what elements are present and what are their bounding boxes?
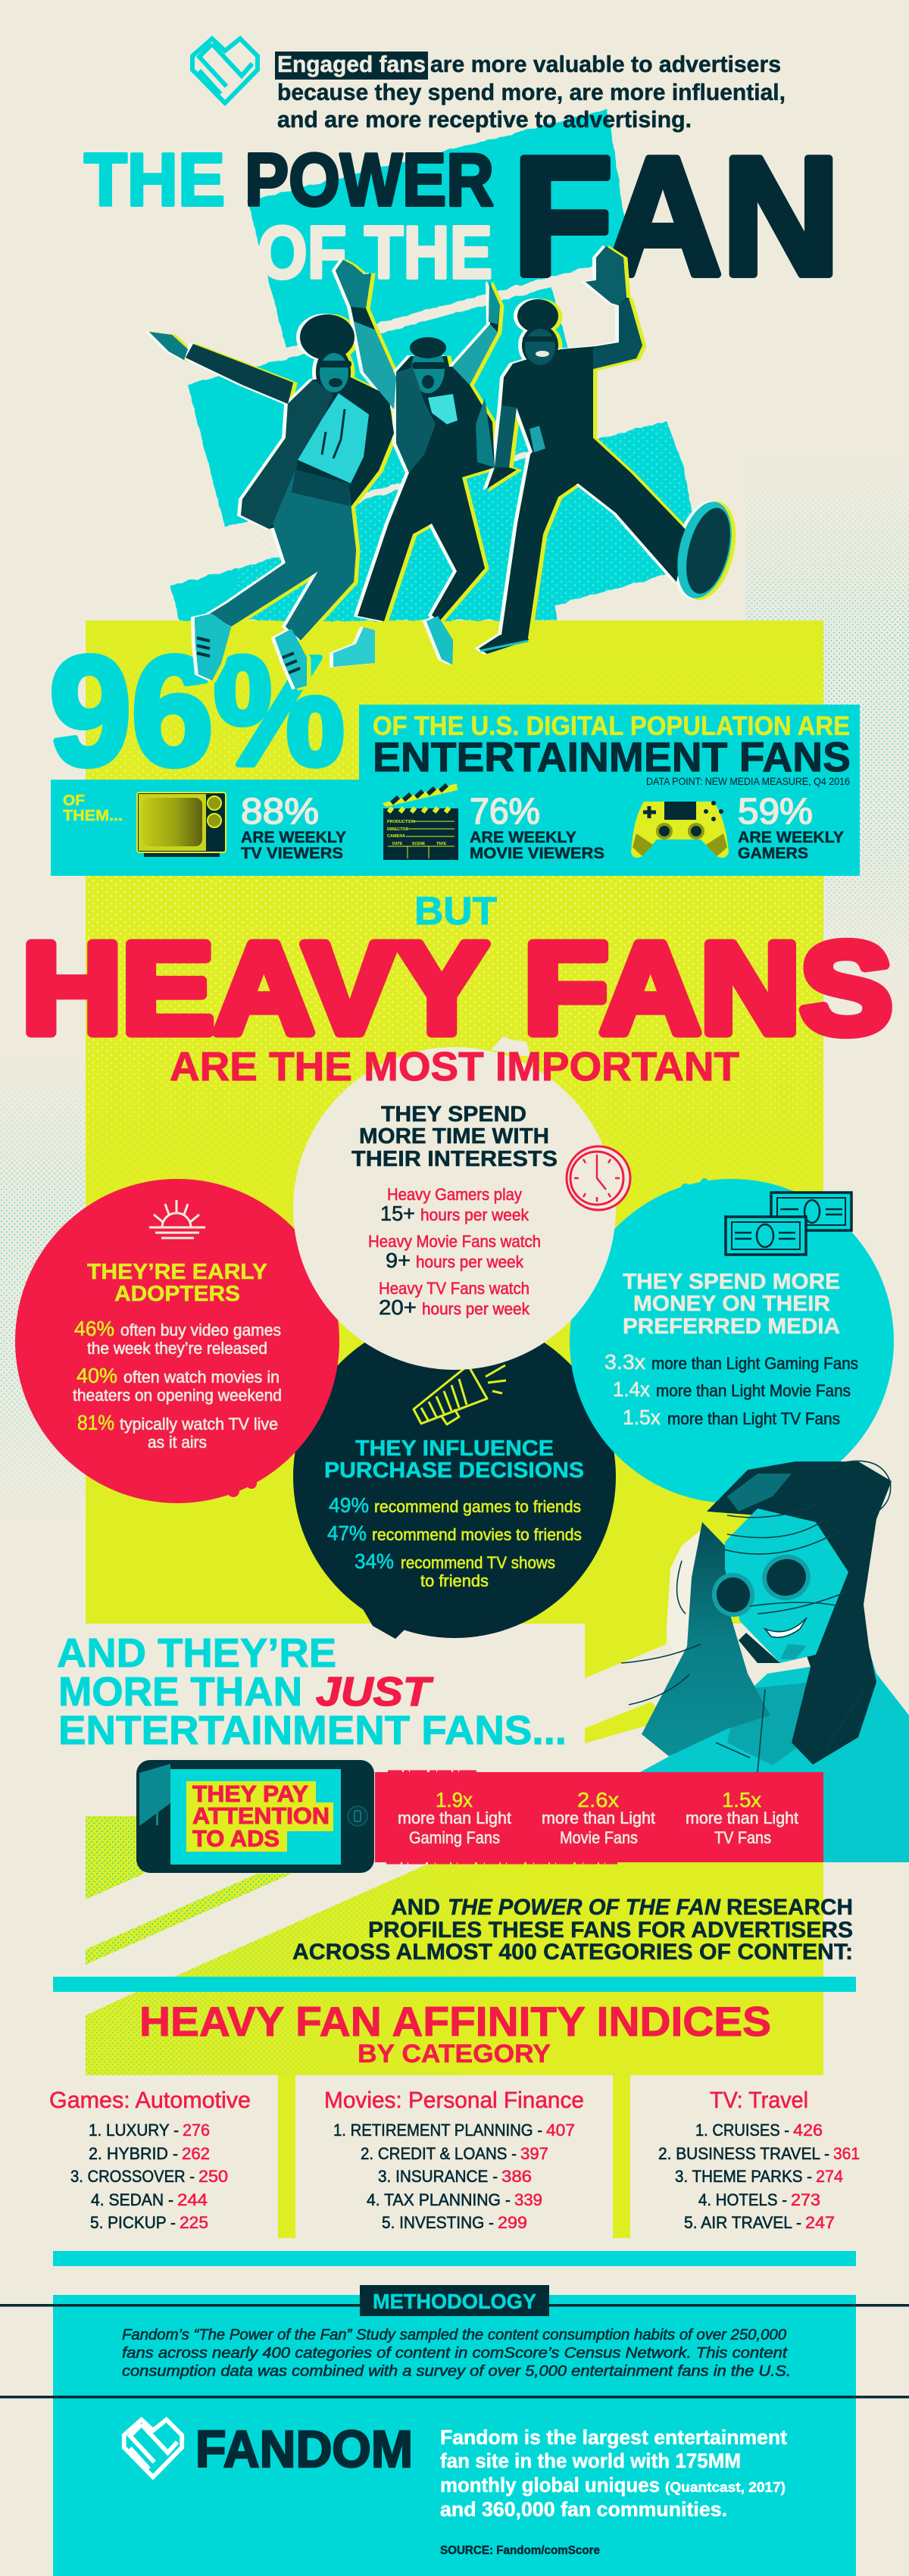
list: movies personal finance: 386 bbox=[501, 2167, 532, 2186]
time stats bbox=[368, 1185, 541, 1319]
heading: they spend more time: THEY SPEND bbox=[381, 1102, 526, 1127]
money stats: more than Light Movie Fans bbox=[656, 1381, 851, 1400]
heading: they spend more money: PREFERRED MEDIA bbox=[623, 1315, 840, 1339]
list: movies personal finance: 299 bbox=[498, 2213, 527, 2232]
text: research profiles: ACROSS ALMOST 400 CATEGORIES OF CONTENT: bbox=[292, 1940, 853, 1965]
band halftone bbox=[227, 421, 693, 621]
heading: they spend more money: THEY SPEND MORE bbox=[623, 1270, 840, 1294]
list: games automotive: 1. LUXURY - bbox=[89, 2121, 179, 2140]
title bbox=[84, 123, 840, 311]
adopter stats: 81% bbox=[77, 1411, 114, 1434]
logo: fandom wordmark: FANDOM bbox=[195, 2420, 413, 2478]
list: tv travel: 4. HOTELS - bbox=[698, 2190, 787, 2209]
icon: banknotes bbox=[726, 1193, 851, 1255]
list: movies personal finance: 1. RETIREMENT PLANNING - bbox=[333, 2121, 542, 2140]
list: games automotive: 250 bbox=[198, 2167, 228, 2186]
icon: phone with they pay attention to ads: THEY PAY bbox=[192, 1780, 308, 1807]
intro text: Engaged fans bbox=[277, 51, 426, 77]
money stats: more than Light TV Fans bbox=[667, 1409, 840, 1428]
list: tv travel: 361 bbox=[833, 2144, 860, 2163]
panel: methodology and fandom bbox=[0, 2285, 909, 2576]
icon: megaphone bbox=[414, 1355, 506, 1424]
adopter stats: 46% bbox=[74, 1317, 114, 1340]
heading: are the most important: ARE THE MOST IMPORTANT bbox=[170, 1044, 739, 1089]
text: research profiles: PROFILES THESE FANS FOR ADVERTISERS bbox=[368, 1918, 853, 1943]
list: games automotive: 2. HYBRID - bbox=[89, 2144, 178, 2163]
torn cyan hero bands bbox=[170, 109, 693, 621]
list: tv travel: 1. CRUISES - bbox=[695, 2121, 789, 2140]
heading: more than just entertainment fans bbox=[57, 1630, 567, 1753]
of them label bbox=[63, 792, 123, 824]
money stats: 3.3x bbox=[604, 1350, 645, 1374]
methodology text: fans across nearly 400 categories of content in comScore’s Census Network. This content bbox=[122, 2345, 789, 2362]
heading: heavy fan affinity indices bbox=[139, 1998, 771, 2068]
list: movies personal finance bbox=[324, 2087, 584, 2232]
heading: they're early adopters: THEY’RE EARLY bbox=[87, 1260, 267, 1284]
list: games automotive: 3. CROSSOVER - bbox=[70, 2167, 195, 2186]
influence stats: to friends bbox=[420, 1571, 489, 1590]
stat: TV fans: TV Fans bbox=[714, 1828, 771, 1847]
text: research profiles bbox=[292, 1895, 853, 1965]
adopter stats: 40% bbox=[77, 1364, 117, 1387]
heading: they spend more time bbox=[351, 1102, 558, 1171]
list: movies personal finance: 3. INSURANCE - bbox=[378, 2167, 498, 2186]
time stats: hours per week bbox=[422, 1299, 530, 1318]
heading: they influence bbox=[324, 1436, 584, 1483]
stat: 88 percent TV bbox=[241, 792, 346, 862]
icon: phone with they pay attention to ads: ATTENTION bbox=[192, 1802, 330, 1829]
influence stats: 49% bbox=[329, 1493, 369, 1517]
stat: 76 percent movies bbox=[470, 792, 604, 862]
heading: they influence: PURCHASE DECISIONS bbox=[324, 1458, 584, 1483]
influence stats: 34% bbox=[355, 1549, 394, 1573]
stat: TV fans: more than Light bbox=[686, 1809, 798, 1827]
list: games automotive: 4. SEDAN - bbox=[91, 2190, 173, 2209]
stat: 59 percent gamers: ARE WEEKLY bbox=[738, 829, 844, 846]
list: tv travel: 426 bbox=[793, 2121, 823, 2140]
heading: they spend more time: MORE TIME WITH bbox=[359, 1124, 549, 1149]
adopter stats: often watch movies in bbox=[123, 1368, 280, 1386]
heading: they spend more money: MONEY ON THEIR bbox=[633, 1292, 830, 1316]
headline: of the U.S. digital population: OF THE U.S. DIGITAL POPULATION ARE bbox=[373, 711, 850, 741]
list: movies personal finance: 4. TAX PLANNING - bbox=[367, 2190, 511, 2209]
methodology text: consumption data was combined with a survey of over 5,000 entertainment fans in the U.S. bbox=[122, 2363, 791, 2380]
icon: clapperboard: PRODUCTION bbox=[387, 820, 415, 824]
icon: clapperboard: SCENE bbox=[412, 842, 426, 846]
list: movies personal finance: 2. CREDIT & LOANS - bbox=[361, 2144, 517, 2163]
title: OF THE bbox=[258, 211, 492, 294]
of them label: THEM... bbox=[63, 808, 123, 824]
heading: more than just entertainment fans: MORE THAN bbox=[58, 1669, 302, 1715]
heading: but: BUT bbox=[414, 889, 497, 933]
stat: gaming fans: more than Light bbox=[398, 1809, 511, 1827]
methodology text: Fandom’s “The Power of the Fan” Study sampled the content consumption habits of over 250,000 bbox=[122, 2327, 786, 2343]
headline: entertainment fans: ENTERTAINMENT FANS bbox=[373, 733, 851, 780]
stat: TV fans bbox=[686, 1788, 798, 1847]
list: tv travel: 247 bbox=[805, 2213, 835, 2232]
logo: heart top bbox=[192, 39, 258, 103]
stat: 76 percent movies: MOVIE VIEWERS bbox=[470, 845, 604, 862]
decorative halftone top right bbox=[746, 455, 909, 1000]
logo: fandom heart bbox=[124, 2420, 182, 2477]
title: FAN bbox=[513, 123, 840, 311]
list: tv travel: 2. BUSINESS TRAVEL - bbox=[658, 2144, 829, 2163]
intro text bbox=[275, 51, 786, 133]
stat: movie fans bbox=[542, 1788, 655, 1847]
heading: more than just entertainment fans: JUST bbox=[316, 1669, 433, 1715]
fandom description: fan site in the world with 175MM bbox=[440, 2449, 741, 2472]
influence stats bbox=[327, 1493, 582, 1590]
list: movies personal finance: 5. INVESTING - bbox=[382, 2213, 494, 2232]
list: games automotive: 244 bbox=[177, 2190, 208, 2209]
adopter stats bbox=[73, 1317, 282, 1452]
adopter stats: typically watch TV live bbox=[120, 1415, 278, 1433]
heading: they spend more money bbox=[623, 1270, 840, 1339]
money stats bbox=[604, 1350, 858, 1429]
circle: spend more money bbox=[570, 1178, 894, 1503]
list: games automotive: 262 bbox=[182, 2144, 210, 2163]
stat: movie fans: 2.6x bbox=[577, 1788, 619, 1812]
adopter stats: the week they’re released bbox=[87, 1339, 267, 1358]
list: tv travel: 5. AIR TRAVEL - bbox=[684, 2213, 801, 2232]
heading: heavy fan affinity indices: HEAVY FAN AFFINITY INDICES bbox=[139, 1998, 771, 2045]
list: tv travel bbox=[658, 2087, 860, 2232]
icon: clapperboard bbox=[383, 783, 458, 860]
stat: 59 percent gamers bbox=[738, 792, 844, 862]
of them label: OF bbox=[63, 792, 85, 809]
icon: clapperboard: DIRECTOR bbox=[387, 827, 409, 832]
money stats: more than Light Gaming Fans bbox=[651, 1354, 858, 1373]
heading: more than just entertainment fans: ENTERTAINMENT FANS... bbox=[58, 1708, 567, 1753]
time stats: Heavy Movie Fans watch bbox=[368, 1232, 541, 1251]
icon: clapperboard: CAMERA bbox=[387, 834, 405, 839]
icon: sunrise bbox=[149, 1200, 205, 1238]
fandom description: Fandom is the largest entertainment bbox=[440, 2426, 787, 2449]
list: tv travel: 3. THEME PARKS - bbox=[675, 2167, 812, 2186]
influence stats: recommend games to friends bbox=[374, 1497, 581, 1516]
list: movies personal finance: 407 bbox=[546, 2121, 575, 2140]
adopter stats: often buy video games bbox=[120, 1321, 281, 1340]
methodology text bbox=[122, 2327, 791, 2380]
data source: DATA POINT: NEW MEDIA MEASURE, Q4 2016 bbox=[646, 775, 850, 787]
heading: 96 percent: 96% bbox=[49, 624, 345, 798]
stat: 59 percent gamers: GAMERS bbox=[738, 845, 808, 862]
methodology label bbox=[360, 2285, 549, 2316]
stat: movie fans: Movie Fans bbox=[560, 1828, 638, 1847]
circle: influence purchase decisions bbox=[293, 1315, 616, 1639]
panel: ad attention stats bar bbox=[375, 1771, 823, 1863]
methodology label: METHODOLOGY bbox=[373, 2290, 536, 2313]
icon: television bbox=[137, 792, 226, 857]
intro text: and are more receptive to advertising. bbox=[277, 106, 692, 133]
fandom description: monthly global uniques bbox=[440, 2474, 660, 2496]
stat: 88 percent TV: TV VIEWERS bbox=[241, 845, 343, 862]
stat: gaming fans: 1.9x bbox=[436, 1788, 473, 1812]
heading: they spend more time: THEIR INTERESTS bbox=[351, 1147, 558, 1171]
list: games automotive: 225 bbox=[180, 2213, 208, 2232]
title: THE bbox=[84, 138, 225, 221]
panel: 96 percent statistics bbox=[51, 705, 860, 876]
heading: heavy fans: HEAVY FANS bbox=[22, 917, 892, 1061]
icon: clapperboard: TAKE bbox=[436, 842, 447, 846]
money stats: 1.5x bbox=[623, 1405, 661, 1429]
fandom description: (Quantcast, 2017) bbox=[665, 2480, 786, 2495]
stat: movie fans: more than Light bbox=[542, 1809, 655, 1827]
list: tv travel: 273 bbox=[791, 2190, 820, 2209]
intro text: are more valuable to advertisers bbox=[430, 51, 781, 77]
money stats: 1.4x bbox=[613, 1377, 650, 1401]
stat: 88 percent TV: 88% bbox=[241, 792, 319, 832]
time stats: hours per week bbox=[416, 1252, 524, 1271]
time stats: hours per week bbox=[420, 1205, 529, 1224]
fandom description bbox=[440, 2426, 787, 2521]
icon: phone with they pay attention to ads bbox=[136, 1760, 374, 1873]
influence stats: 47% bbox=[327, 1521, 367, 1545]
heading: they're early adopters: ADOPTERS bbox=[114, 1282, 240, 1306]
stat: 76 percent movies: ARE WEEKLY bbox=[470, 829, 576, 846]
icon: clapperboard: DATE bbox=[392, 842, 403, 846]
list: games automotive: 276 bbox=[183, 2121, 210, 2140]
influence stats: recommend movies to friends bbox=[372, 1525, 582, 1544]
list: tv travel: 274 bbox=[816, 2167, 843, 2186]
source: SOURCE: Fandom/comScore bbox=[440, 2544, 600, 2557]
fandom description: and 360,000 fan communities. bbox=[440, 2498, 727, 2521]
heading: they influence: THEY INFLUENCE bbox=[355, 1436, 554, 1461]
title: POWER bbox=[245, 138, 494, 221]
heading: more than just entertainment fans: AND THEY’RE bbox=[57, 1630, 336, 1676]
circle: early adopters bbox=[15, 1179, 339, 1503]
icon: phone with they pay attention to ads: TO ADS bbox=[192, 1825, 280, 1852]
list: movies personal finance: Movies: Personal Finance bbox=[324, 2087, 584, 2113]
text: research profiles: THE POWER OF THE FAN bbox=[448, 1895, 721, 1920]
stat: gaming fans: Gaming Fans bbox=[409, 1828, 500, 1847]
time stats: 15+ bbox=[380, 1202, 415, 1225]
time stats: Heavy TV Fans watch bbox=[379, 1279, 529, 1298]
heading: they're early adopters bbox=[87, 1260, 267, 1306]
list: movies personal finance: 397 bbox=[520, 2144, 548, 2163]
time stats: 9+ bbox=[386, 1249, 411, 1272]
text: research profiles: RESEARCH bbox=[726, 1895, 853, 1920]
list: games automotive: 5. PICKUP - bbox=[90, 2213, 176, 2232]
decorative halftone left bbox=[0, 1053, 86, 1523]
stat: 88 percent TV: ARE WEEKLY bbox=[241, 829, 346, 846]
yellow background panel bbox=[86, 621, 823, 2238]
adopter stats: theaters on opening weekend bbox=[73, 1386, 282, 1405]
time stats: 20+ bbox=[379, 1296, 417, 1319]
stat: gaming fans bbox=[398, 1788, 511, 1847]
adopter stats: as it airs bbox=[148, 1433, 207, 1452]
text: research profiles: AND bbox=[391, 1895, 440, 1920]
stat: 59 percent gamers: 59% bbox=[738, 792, 813, 832]
list: games automotive bbox=[49, 2087, 251, 2232]
time stats: Heavy Gamers play bbox=[387, 1185, 522, 1204]
hero photo: three jumping fans bbox=[146, 246, 744, 689]
list: movies personal finance: 339 bbox=[514, 2190, 542, 2209]
list: tv travel: TV: Travel bbox=[710, 2087, 808, 2113]
circle: spend more time bbox=[293, 1036, 630, 1370]
icon: clock bbox=[567, 1146, 630, 1210]
photo: smiling woman with sunglasses bbox=[621, 1461, 909, 1862]
influence stats: recommend TV shows bbox=[401, 1553, 555, 1572]
stat: TV fans: 1.5x bbox=[722, 1788, 761, 1812]
icon: game controller bbox=[631, 801, 729, 858]
list: games automotive: Games: Automotive bbox=[49, 2087, 251, 2113]
intro text: because they spend more, are more influential, bbox=[277, 79, 786, 105]
heading: heavy fan affinity indices: BY CATEGORY bbox=[358, 2040, 551, 2068]
stat: 76 percent movies: 76% bbox=[470, 792, 540, 832]
